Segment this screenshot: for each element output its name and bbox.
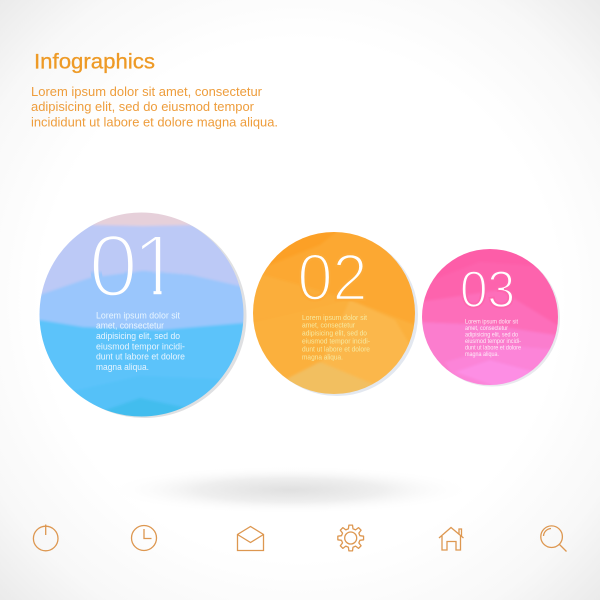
icon: clock xyxy=(132,526,156,550)
number 01: 0 xyxy=(89,216,138,315)
text block 03: magna aliqua. xyxy=(465,352,499,358)
text block 01: amet, consectetur xyxy=(96,321,164,331)
text block 03: Lorem ipsum dolor sit xyxy=(465,320,518,326)
text block 01: Lorem ipsum dolor sit xyxy=(96,310,180,320)
text block 03: eiusmod tempor incidi- xyxy=(465,339,521,345)
text block 03: amet, consectetur xyxy=(465,326,508,332)
text block 02: magna aliqua. xyxy=(302,352,343,361)
panel: circle 03 xyxy=(422,249,560,386)
icon row xyxy=(33,524,566,552)
text block 02: adipisicing elit, sed do xyxy=(302,329,367,338)
text block 02: dunt ut labore et dolore xyxy=(302,344,370,353)
text block 02: Lorem ipsum dolor sit xyxy=(302,313,367,322)
number 03: 03 xyxy=(460,261,515,319)
text block 03: adipisicing elit, sed do xyxy=(465,332,519,338)
intro text xyxy=(31,84,278,130)
number 01: 1 xyxy=(132,216,181,315)
text block 01: dunt ut labore et dolore xyxy=(96,352,185,362)
text block 03 xyxy=(465,320,522,358)
number 01 xyxy=(90,236,162,296)
icon: mail xyxy=(238,526,264,550)
icon: power xyxy=(33,524,58,551)
icon: house xyxy=(439,528,464,550)
intro text: Lorem ipsum dolor sit amet, consectetur xyxy=(31,84,263,99)
intro text: incididunt ut labore et dolore magna aliqua. xyxy=(31,114,278,130)
panel: circle 01 xyxy=(40,212,246,418)
icon: search xyxy=(541,526,566,552)
text block 01: eiusmod tempor incidi- xyxy=(96,341,185,351)
icon: gear xyxy=(338,525,364,551)
title: Infographics xyxy=(34,50,155,74)
text block 01: adipisicing elit, sed do xyxy=(96,331,180,341)
panel: circle 02 xyxy=(253,232,418,396)
text block 02 xyxy=(302,313,371,361)
text block 02: eiusmod tempor incidi- xyxy=(302,336,371,346)
text block 01 xyxy=(96,310,185,372)
ground shadow xyxy=(105,466,475,514)
text block 03: dunt ut labore et dolore xyxy=(465,346,522,352)
intro text: adipisicing elit, sed do eiusmod tempor xyxy=(31,99,255,114)
text block 02: amet, consectetur xyxy=(302,321,356,330)
text block 01: magna aliqua. xyxy=(96,362,149,372)
number 02: 02 xyxy=(298,240,368,314)
